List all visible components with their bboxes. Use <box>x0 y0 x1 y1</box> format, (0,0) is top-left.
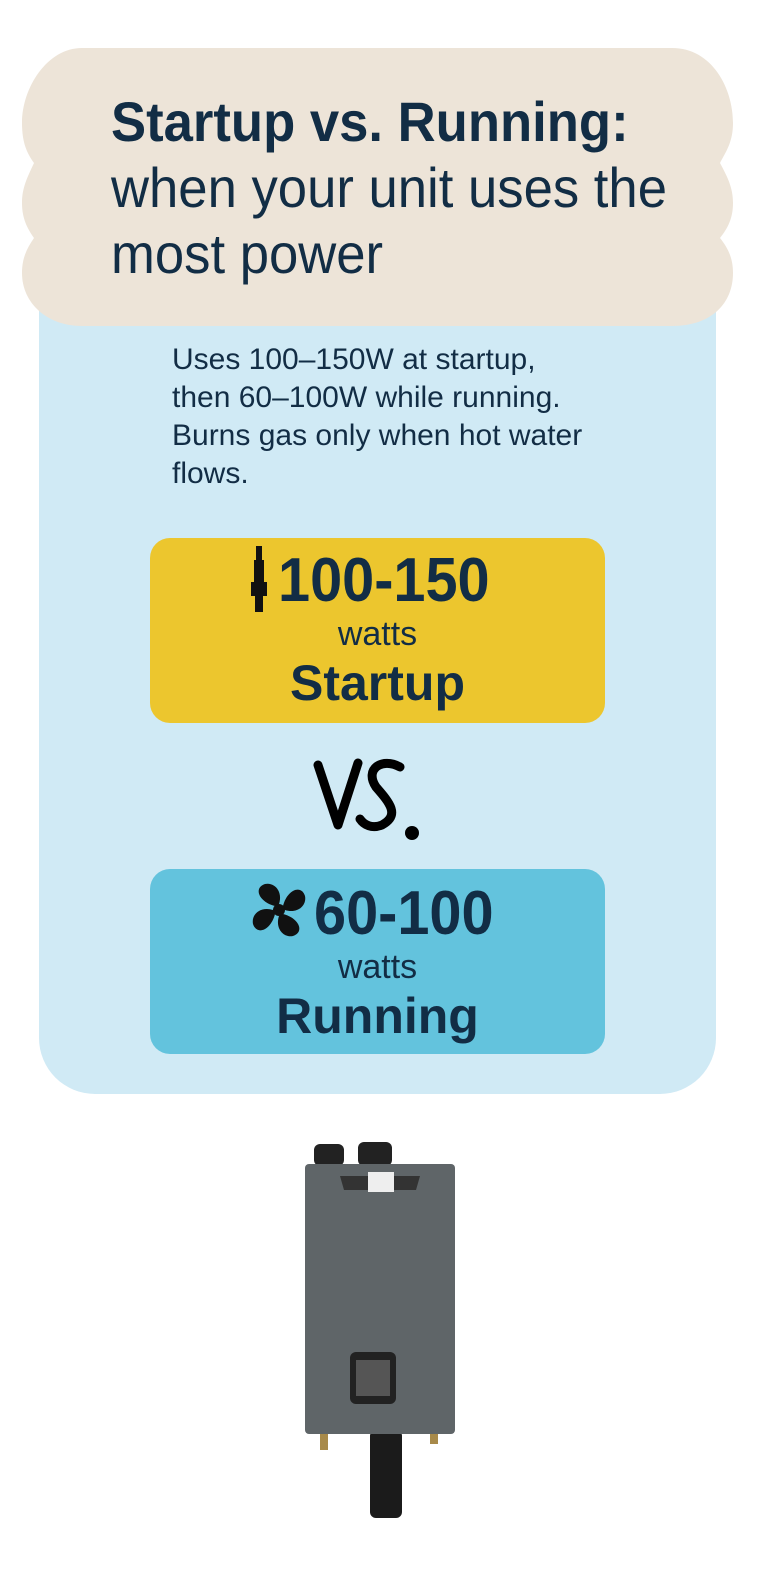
running value: 60-100 <box>314 879 494 948</box>
water heater illustration <box>305 1142 455 1518</box>
startup box <box>150 538 605 723</box>
panel: light blue background <box>39 290 716 1094</box>
description text: Uses 100–150W at startup, <box>172 343 536 376</box>
running box <box>150 869 605 1054</box>
icon: fan <box>252 884 306 936</box>
description text: then 60–100W while running. <box>172 381 561 414</box>
title text: when your unit uses the <box>111 156 667 219</box>
description text: Burns gas only when hot water <box>172 419 582 452</box>
running box: watts <box>338 948 417 986</box>
startup box: watts <box>338 615 417 653</box>
description text: flows. <box>172 457 249 490</box>
description text <box>172 343 582 490</box>
title blob <box>22 48 733 326</box>
icon: spark plug <box>251 546 267 612</box>
vs label <box>314 758 419 840</box>
title text: Startup vs. Running: <box>111 90 629 153</box>
title text <box>110 90 667 285</box>
running box: Running <box>276 988 479 1044</box>
startup value: 100-150 <box>278 546 490 615</box>
title text: most power <box>111 222 383 285</box>
startup box: Startup <box>290 655 465 711</box>
